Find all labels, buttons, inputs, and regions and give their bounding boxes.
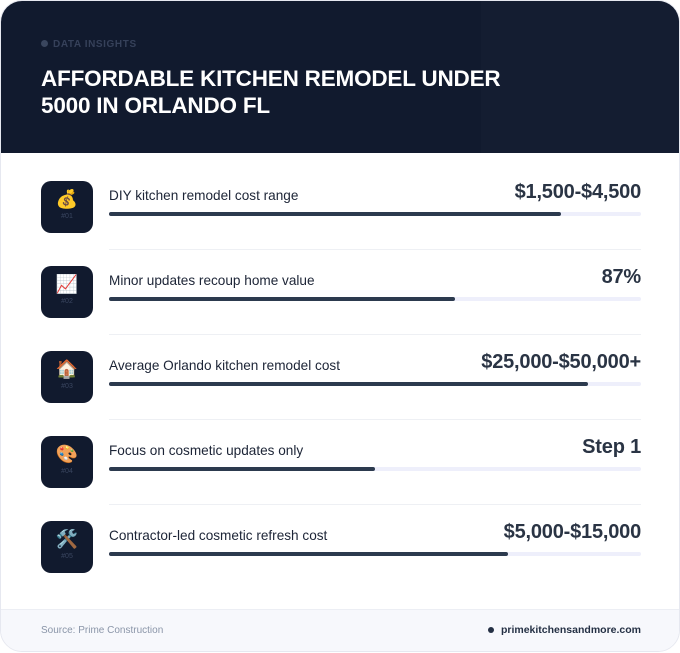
row 5: $5,000-$15,000 [504, 521, 641, 543]
url: primekitchensandmore.com [501, 624, 641, 636]
icon: tools: #05 [61, 553, 73, 560]
row 5: Contractor-led cosmetic refresh cost [109, 528, 327, 543]
row 3 [41, 351, 641, 403]
icon: chart: #02 [61, 298, 73, 305]
row 5 [41, 521, 641, 573]
row 2: 87% [602, 266, 641, 288]
icon: house [41, 351, 93, 403]
title: 5000 IN ORLANDO FL [41, 93, 270, 118]
icon: chart: 📈 [56, 274, 78, 295]
tag: data insights: DATA INSIGHTS [53, 39, 137, 50]
row 4: Step 1 [582, 436, 641, 458]
row 4 [41, 436, 641, 488]
row 4: Focus on cosmetic updates only [109, 443, 303, 458]
icon: palette: 🎨 [56, 444, 78, 465]
icon: tools: 🛠️ [56, 529, 78, 550]
icon: money bag [41, 181, 93, 233]
icon: palette: #04 [61, 468, 73, 475]
icon: chart [41, 266, 93, 318]
row 1: DIY kitchen remodel cost range [109, 188, 298, 203]
row 3: $25,000-$50,000+ [481, 351, 641, 373]
footer [1, 609, 680, 653]
source: Source: Prime Construction [41, 625, 163, 636]
icon: money bag: #01 [61, 213, 73, 220]
title [41, 66, 500, 118]
row 3: Average Orlando kitchen remodel cost [109, 358, 340, 373]
icon: house: 🏠 [56, 359, 78, 380]
row 2: Minor updates recoup home value [109, 273, 315, 288]
header [0, 0, 680, 153]
row 2 [41, 266, 641, 318]
icon: house: #03 [61, 383, 73, 390]
icon: tools [41, 521, 93, 573]
row 1: $1,500-$4,500 [515, 181, 641, 203]
title: AFFORDABLE KITCHEN REMODEL UNDER [41, 66, 500, 91]
row 1 [41, 181, 641, 233]
icon: palette [41, 436, 93, 488]
icon: money bag: 💰 [56, 189, 78, 210]
